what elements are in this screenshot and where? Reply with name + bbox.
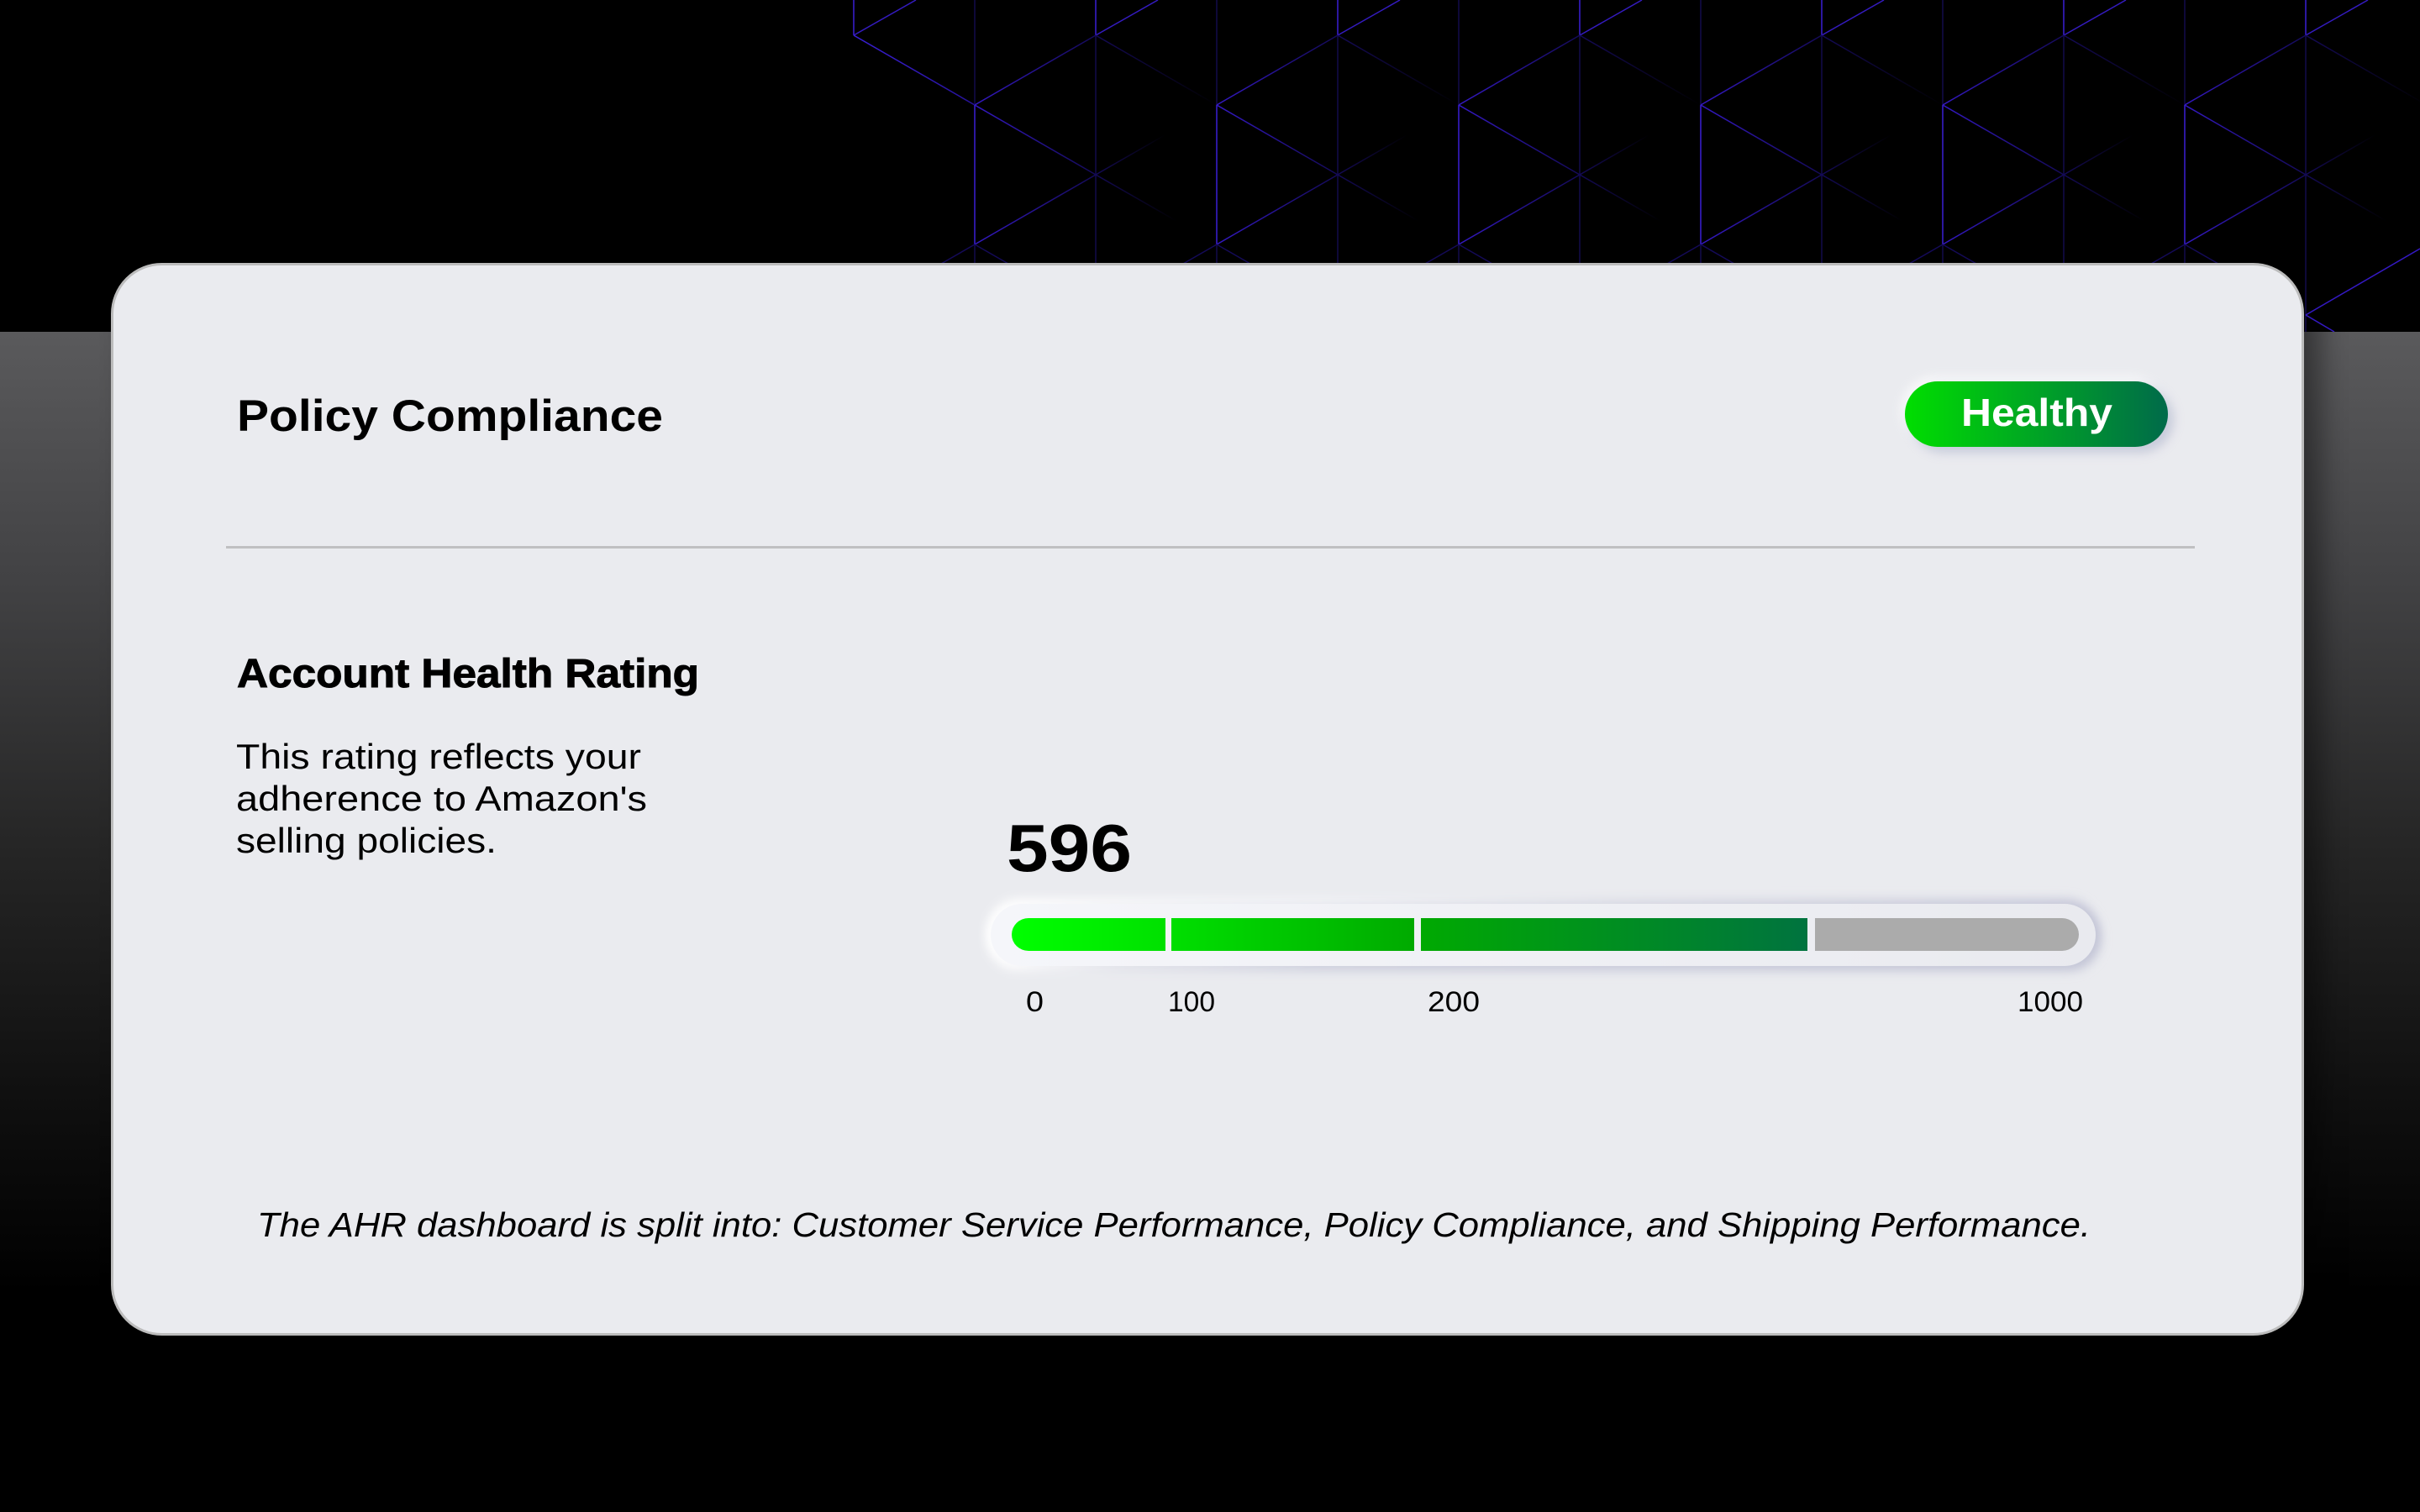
card shadow	[128, 269, 2321, 1336]
status pill: Healthy	[1902, 377, 2174, 453]
scale labels: 1000	[2018, 986, 2083, 1018]
text block: rating description	[236, 737, 647, 860]
bar segment: 0 to 100	[1012, 918, 1165, 951]
bar segment: 200 to 596	[1421, 918, 1807, 951]
geometric line pattern	[854, 0, 2420, 332]
bar segment: 100 to 200	[1171, 918, 1414, 951]
text block: rating description: selling policies.	[236, 821, 497, 860]
score value: 596: 596	[1007, 811, 1132, 885]
status pill: Healthy: Healthy	[1961, 391, 2112, 434]
scale labels: 0	[1026, 986, 1044, 1018]
background: grey gradient band	[0, 332, 2420, 1512]
scale labels	[1026, 986, 2083, 1018]
rating bar	[987, 899, 2101, 971]
text block: rating description: adherence to Amazon's	[236, 779, 647, 818]
scale labels: 200	[1428, 986, 1480, 1018]
footnote: The AHR dashboard is split into: Customer Service Performance, Policy Compliance, and Shipping Performance.	[257, 1205, 2091, 1244]
panel: policy compliance card	[113, 264, 2302, 1334]
heading: Account Health Rating: Account Health Rating	[237, 652, 699, 696]
scale labels: 100	[1168, 986, 1215, 1018]
text block: rating description: This rating reflects your	[236, 737, 641, 776]
heading: Policy Compliance: Policy Compliance	[237, 391, 663, 441]
bar segment: remaining to 1000	[1815, 918, 2079, 951]
